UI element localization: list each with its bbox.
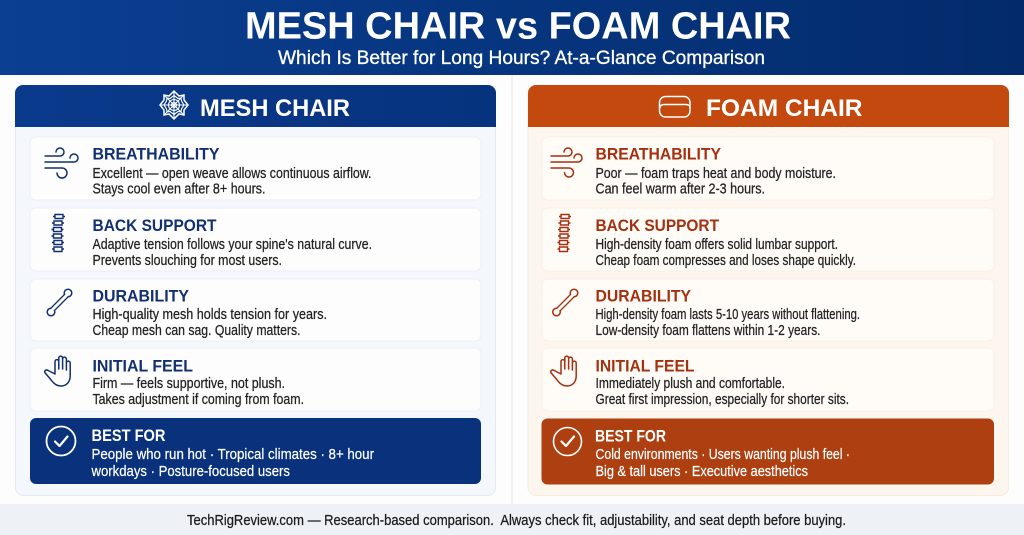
- panel: foam chair: [528, 85, 1009, 496]
- card: breathability: Can feel warm after 2-3 hours.: [596, 182, 765, 198]
- icon: wind: [551, 148, 582, 177]
- card: durability: Cheap mesh can sag. Quality matters.: [92, 323, 300, 339]
- icon: hand: [551, 356, 576, 386]
- best for: mesh: workdays · Posture-focused users: [91, 464, 290, 480]
- card: breathability: BREATHABILITY: [596, 144, 722, 164]
- card: initial feel: Great first impression, especially for shorter sits.: [596, 392, 849, 408]
- icon: check circle: [554, 428, 582, 456]
- card: back support: Adaptive tension follows your spine's natural curve.: [92, 237, 372, 253]
- card: initial feel: INITIAL FEEL: [596, 356, 694, 376]
- icon: check circle: [46, 426, 76, 456]
- best for: mesh: BEST FOR: [92, 426, 166, 445]
- card: durability: High-density foam lasts 5-10 years without flattening.: [596, 307, 860, 323]
- panel: mesh chair: [15, 85, 496, 496]
- icon: bone: [553, 289, 578, 316]
- card: breathability: Stays cool even after 8+ hours.: [92, 182, 266, 198]
- best for: foam: BEST FOR: [595, 426, 666, 446]
- icon: bone: [47, 289, 72, 316]
- icon: foam cushion: [660, 96, 690, 117]
- best for: foam: Big & tall users · Executive aesthetics: [596, 464, 808, 480]
- card: back support: [30, 208, 481, 271]
- card: initial feel: Takes adjustment if coming from foam.: [92, 392, 304, 408]
- card: breathability: [542, 137, 994, 200]
- card: durability: [30, 279, 481, 341]
- card: back support: BACK SUPPORT: [92, 216, 217, 235]
- card: breathability: BREATHABILITY: [92, 144, 220, 164]
- best for: mesh: [30, 418, 481, 484]
- card: durability: DURABILITY: [596, 286, 692, 306]
- card: durability: Low-density foam flattens within 1-2 years.: [596, 323, 820, 339]
- mesh chair heading: [15, 85, 496, 127]
- best for: mesh: People who run hot · Tropical climates · 8+ hour: [92, 447, 374, 463]
- card: initial feel: [542, 348, 994, 411]
- card: back support: High-density foam offers solid lumbar support.: [596, 237, 838, 253]
- title: MESH CHAIR vs FOAM CHAIR: [245, 6, 791, 48]
- card: initial feel: Immediately plush and comfortable.: [596, 376, 785, 392]
- card: durability: DURABILITY: [92, 286, 190, 306]
- subtitle: Which Is Better for Long Hours? At-a-Glance Comparison: [278, 47, 765, 69]
- mesh chair label: MESH CHAIR: [200, 95, 350, 122]
- card: durability: [542, 279, 994, 341]
- best for: foam: [542, 418, 994, 484]
- foam chair heading: [528, 85, 1009, 127]
- card: initial feel: [30, 348, 481, 411]
- header banner: [0, 0, 1024, 75]
- card: back support: Prevents slouching for most users.: [92, 253, 282, 269]
- card: back support: BACK SUPPORT: [596, 216, 720, 235]
- icon: hand: [45, 356, 70, 386]
- card: back support: Cheap foam compresses and loses shape quickly.: [596, 253, 856, 269]
- footer note: TechRigReview.com — Research-based comparison. Always check fit, adjustability, and seat depth before buying.: [187, 513, 846, 529]
- card: breathability: [30, 137, 481, 200]
- best for: foam: Cold environments · Users wanting plush feel ·: [596, 447, 850, 463]
- icon: spider web: [160, 91, 188, 119]
- icon: spine: [52, 214, 65, 252]
- foam chair label: FOAM CHAIR: [706, 95, 862, 122]
- footer: [0, 504, 1024, 535]
- icon: wind: [45, 148, 78, 178]
- card: breathability: Excellent — open weave allows continuous airflow.: [92, 166, 372, 182]
- icon: spine: [558, 214, 571, 252]
- card: initial feel: INITIAL FEEL: [92, 356, 193, 376]
- card: initial feel: Firm — feels supportive, not plush.: [92, 376, 285, 392]
- card: back support: [542, 208, 994, 271]
- card: durability: High-quality mesh holds tension for years.: [92, 307, 327, 323]
- card: breathability: Poor — foam traps heat and body moisture.: [596, 166, 836, 182]
